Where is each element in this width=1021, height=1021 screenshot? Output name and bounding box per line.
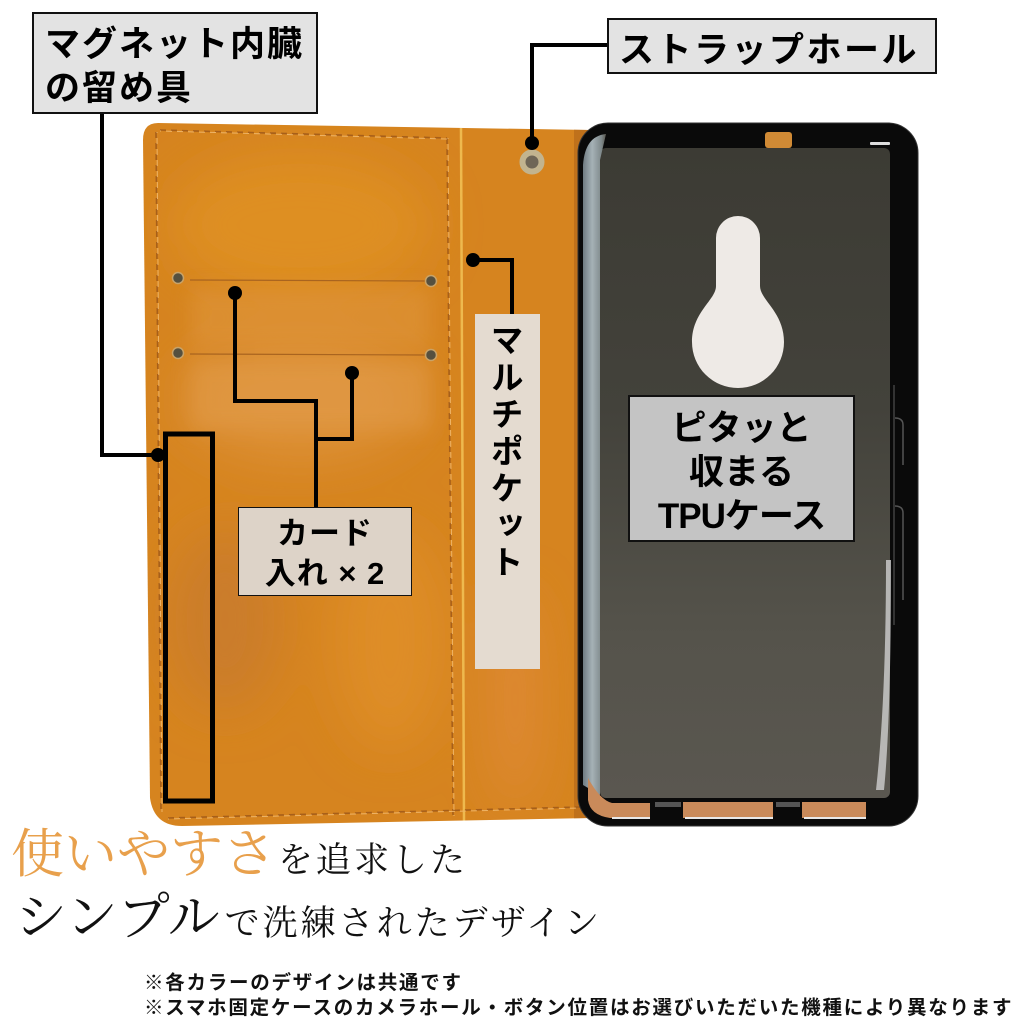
TPU phone case <box>578 123 918 826</box>
label: card slots: カード <box>277 516 373 551</box>
label: card slots <box>238 507 412 596</box>
label: strap hole <box>607 18 937 74</box>
leather cover <box>140 120 595 830</box>
footnotes: ※各カラーのデザインは共通です <box>144 972 463 994</box>
headline line 2: シンプルで洗練されたデザイン <box>15 890 602 947</box>
footnotes <box>144 972 1013 1019</box>
label: TPU case: TPUケース <box>658 497 825 536</box>
label: card slots: 入れ × 2 <box>265 556 385 591</box>
label: magnet clasp: の留め具 <box>45 69 193 108</box>
card slot faces <box>190 288 430 430</box>
label: TPU case: 収まる <box>689 453 794 492</box>
label: multi pocket <box>475 314 540 669</box>
magnet marker box <box>166 434 212 801</box>
label: TPU case <box>628 395 855 542</box>
leader lines <box>102 45 610 510</box>
strap eyelet <box>522 152 542 172</box>
label: strap hole: ストラップホール <box>619 31 919 70</box>
wallet case illustration <box>100 43 918 826</box>
headline line 1: 使いやすさを追求した <box>11 826 468 884</box>
leader dots <box>151 136 539 462</box>
footnotes: ※スマホ固定ケースのカメラホール・ボタン位置はお選びいただいた機種により異なります <box>144 997 1013 1019</box>
label: multi pocket: マルチポケット <box>486 323 523 582</box>
label: magnet clasp: マグネット内臓 <box>45 25 304 64</box>
seam and stitching <box>156 128 590 823</box>
label: TPU case: ピタッと <box>671 409 812 448</box>
label: magnet clasp <box>32 12 318 114</box>
